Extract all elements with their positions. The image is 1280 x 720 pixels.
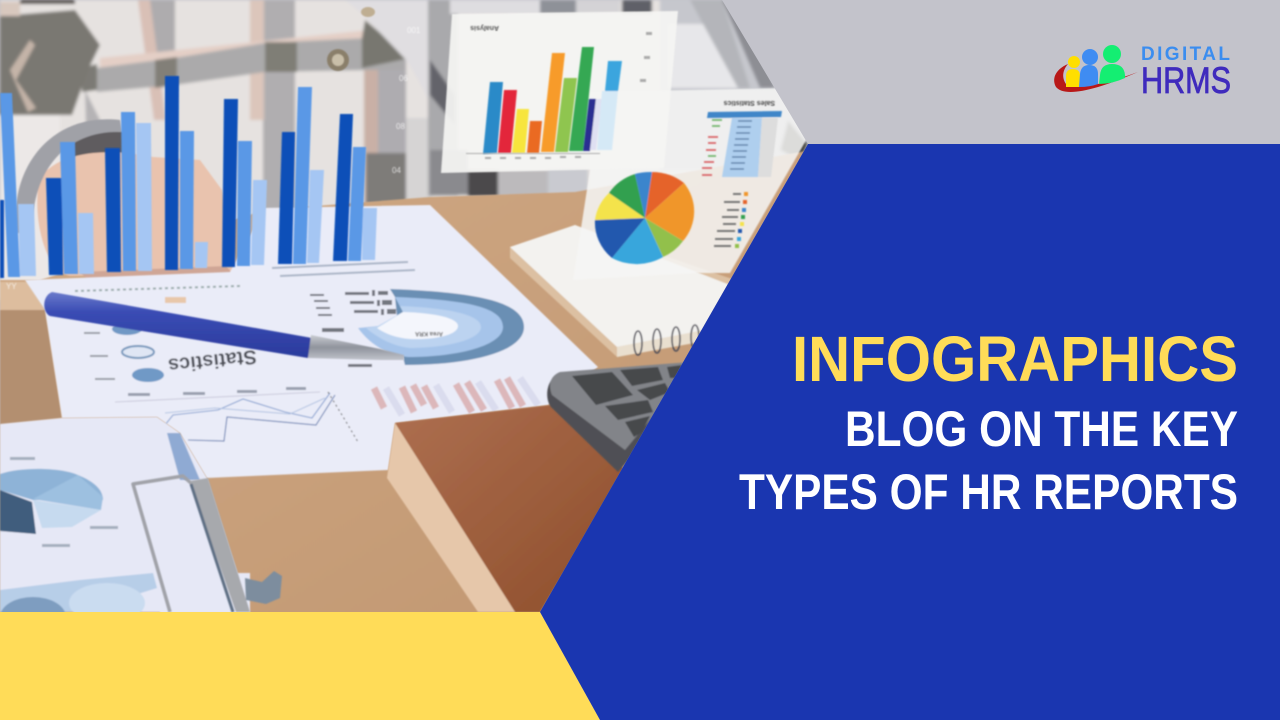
photo: sleeve and hand xyxy=(16,118,236,278)
photo: plaid shirt xyxy=(0,0,820,300)
chart axis labels: 08 xyxy=(396,122,405,131)
icon: red swoosh xyxy=(1054,64,1138,92)
paper: small pie icons xyxy=(84,323,164,382)
chart axis labels xyxy=(6,26,421,291)
photo: statistics paper xyxy=(25,205,598,478)
chart axis labels: 001 xyxy=(407,26,421,35)
vertical gray stripes xyxy=(148,0,175,60)
paper: line chart xyxy=(115,392,358,442)
bars: light blue series xyxy=(18,123,377,276)
shirt behind panels xyxy=(428,0,458,196)
pie chart xyxy=(595,172,694,264)
photo: clipboard sheet with pie xyxy=(0,416,251,612)
chart axis labels: 04 xyxy=(392,166,401,175)
paper: doughnut chart xyxy=(358,289,524,365)
photo: blue pen xyxy=(44,292,404,360)
logo text: hrms: HRMS xyxy=(1141,60,1231,101)
bars: mid blue series xyxy=(0,87,366,277)
panel: yellow bottom band xyxy=(0,612,600,720)
chart axis labels: YY xyxy=(6,282,17,291)
photo: wooden table xyxy=(0,150,812,620)
chart axis labels: 06 xyxy=(399,74,408,83)
photo: analyst desk with charts xyxy=(0,0,820,637)
paper: doughnut chart: Area KRA xyxy=(414,330,443,336)
photo: wooden book block xyxy=(387,405,625,612)
dark left plaid xyxy=(0,10,100,115)
photo: calculator xyxy=(547,362,700,472)
table xyxy=(702,111,782,177)
logo: digital hrms xyxy=(1054,44,1231,101)
paper: printed rules xyxy=(75,262,415,291)
horizontal gray band xyxy=(97,38,405,92)
photo: spiral notebook xyxy=(510,225,735,357)
colored bars xyxy=(483,47,622,154)
paper: peach tab xyxy=(165,297,186,303)
upper right sleeve fold xyxy=(380,34,410,61)
bars: dark blue series xyxy=(0,76,353,278)
chart heading: Analysis xyxy=(470,24,499,31)
subtitle: blog on the key types of hr reports xyxy=(739,401,1238,520)
paper: mini legend xyxy=(310,290,396,367)
floating panel: sales statistics with pie xyxy=(573,88,812,280)
icon: green person xyxy=(1099,45,1125,84)
panel: blue title block xyxy=(540,144,1280,720)
paper: pink bar strip xyxy=(374,378,538,415)
legend xyxy=(714,192,748,248)
logo text: digital: DIGITAL xyxy=(1141,44,1230,65)
panel heading: Sales Statistics xyxy=(724,99,775,106)
title: infographics: INFOGRAPHICS xyxy=(792,323,1238,395)
right shoulder folds xyxy=(659,0,808,152)
icon: shirt buttons xyxy=(327,7,375,71)
paper: upside-down heading: Statistics xyxy=(167,345,258,376)
chart axis xyxy=(466,32,652,159)
icon: yellow person xyxy=(1066,56,1080,87)
icon: blue person xyxy=(1079,49,1098,87)
floating panel: analysis bar chart xyxy=(441,11,678,173)
photo: clipboard metal clip xyxy=(133,476,282,612)
floating blue bar chart xyxy=(0,26,421,291)
vertical peach stripes xyxy=(138,0,166,120)
